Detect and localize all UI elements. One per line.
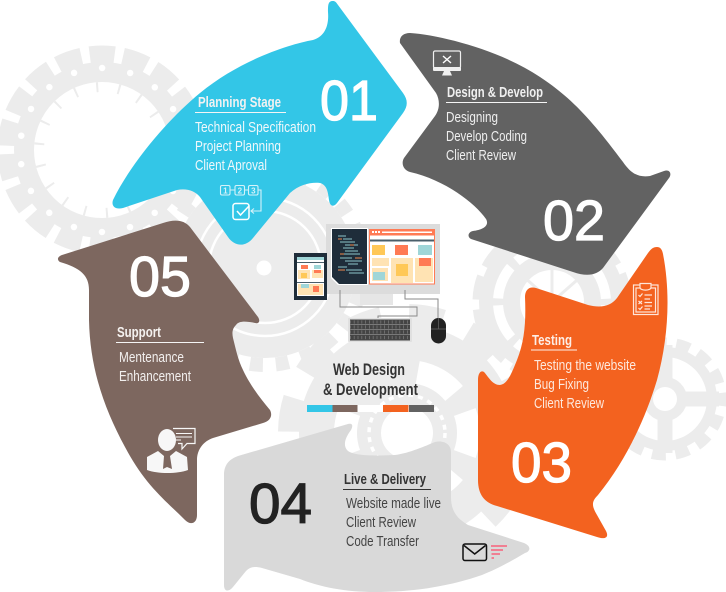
- web page panel: [369, 229, 435, 284]
- panel: 04 live and delivery: [224, 424, 529, 592]
- text: support items: [119, 349, 192, 385]
- mouse: [431, 318, 446, 344]
- gear: bottom centre: [289, 315, 525, 551]
- text: testing items: Bug Fixing: [534, 376, 589, 393]
- title: web design and development: & Development: [323, 380, 418, 399]
- text: support items: Mentenance: [119, 349, 184, 366]
- keyboard: [348, 318, 412, 342]
- monitor: [326, 224, 440, 305]
- panel: 03 testing: [478, 247, 668, 538]
- gear: far right: [608, 342, 722, 456]
- title: web design and development: Web Design: [333, 360, 405, 379]
- arrow: dark grey: [400, 33, 670, 275]
- cables: [340, 290, 438, 318]
- text: delivery items: Website made live: [346, 495, 441, 512]
- text: delivery items: Client Review: [346, 514, 416, 531]
- gear: centre left: [167, 169, 363, 365]
- heading: testing: Testing: [532, 332, 572, 349]
- text: design items: Designing: [446, 109, 498, 126]
- text: design items: [446, 109, 527, 164]
- number: 02: 02: [543, 189, 605, 253]
- panel: 01 planning stage: [112, 1, 407, 245]
- title: web design and development: [323, 360, 418, 399]
- icon: clipboard: [634, 284, 658, 314]
- number: 03: 03: [511, 431, 572, 495]
- text: planning items: Technical Specification: [195, 119, 316, 136]
- text: planning items: [195, 119, 316, 174]
- heading: live and delivery: Live & Delivery: [344, 471, 426, 488]
- central illustration: devices: [294, 224, 446, 344]
- colour bar: [307, 405, 434, 412]
- icon: numbered steps and check: 1: [223, 186, 228, 196]
- icon: numbered steps and check: 2: [238, 186, 243, 196]
- icon: envelope: [463, 544, 507, 560]
- gear: upper right: [477, 227, 627, 377]
- text: support items: Enhancement: [119, 368, 192, 385]
- arrow: brown: [58, 221, 271, 523]
- text: testing items: [534, 357, 636, 412]
- tablet: [294, 253, 327, 300]
- arrow: orange: [478, 247, 668, 538]
- icon: numbered steps and check: 3: [251, 186, 256, 196]
- panel: 02 design and develop: [400, 33, 670, 275]
- text: planning items: Project Planning: [195, 138, 281, 155]
- number: 04: 04: [249, 472, 312, 536]
- arrow: light grey: [224, 424, 529, 592]
- number: 05: 05: [129, 245, 191, 309]
- code panel: [331, 228, 368, 285]
- icon: numbered steps and check: [220, 186, 261, 220]
- text: delivery items: [346, 495, 441, 550]
- heading: planning stage: Planning Stage: [198, 94, 281, 111]
- text: delivery items: Code Transfer: [346, 533, 419, 550]
- icon: support person with speech bubble: [147, 428, 195, 473]
- arrow: blue: [112, 1, 407, 245]
- number: 01: 01: [320, 69, 378, 133]
- text: design items: Develop Coding: [446, 128, 527, 145]
- panel: 05 support: [58, 221, 271, 523]
- text: planning items: Client Aproval: [195, 157, 267, 174]
- heading: support: Support: [117, 324, 161, 341]
- text: testing items: Client Review: [534, 395, 604, 412]
- gear: top left: [6, 54, 198, 246]
- heading: design and develop: Design & Develop: [447, 84, 543, 101]
- text: design items: Client Review: [446, 147, 516, 164]
- text: testing items: Testing the website: [534, 357, 636, 374]
- icon: monitor: [433, 51, 461, 76]
